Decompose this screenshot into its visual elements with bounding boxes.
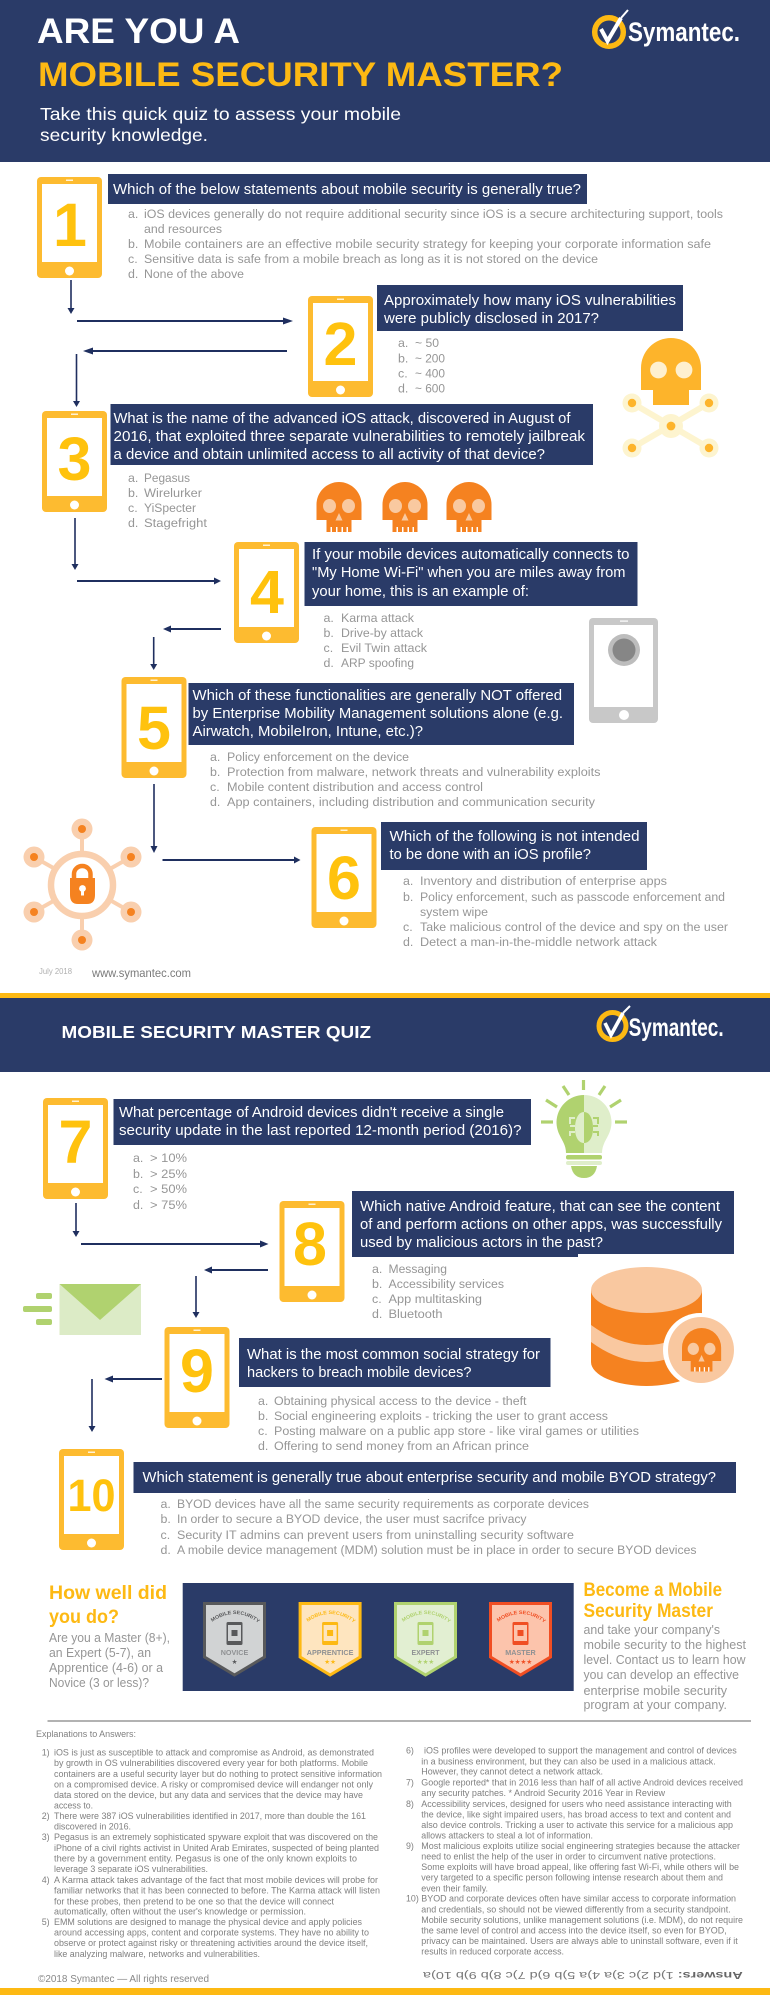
explanations column 2: need to enlist the help of the user in order to circumvent native protections. (421, 1851, 716, 1861)
question 1 options: d. (128, 267, 138, 281)
question 9 heading: hackers to breach mobile devices? (247, 1365, 472, 1381)
question 9 options: Posting malware on a public app store - like viral games or utilities (274, 1424, 639, 1438)
explanations column 1: EMM solutions are designed to manage the physical device and apply policies (54, 1917, 363, 1927)
explanations column 1: access to. (54, 1800, 93, 1810)
question 8 options: b. (372, 1277, 382, 1291)
badge: apprentice: ★★ (324, 1658, 336, 1666)
subtitle (40, 104, 401, 145)
question 4 (234, 542, 638, 670)
question 5 heading: by Enterprise Mobility Management solutions alone (e.g. (192, 706, 563, 722)
arrow: question 5 down (150, 784, 158, 853)
question 1 options: None of the above (144, 267, 244, 281)
become a mobile security master (584, 1580, 746, 1712)
question 3 options: YiSpecter (144, 501, 196, 515)
phone icon 10: 10 (68, 1470, 116, 1521)
question 8 options (372, 1262, 504, 1321)
question 4 heading: If your mobile devices automatically connects to (312, 547, 630, 563)
call to action text: enterprise mobile security (584, 1683, 727, 1698)
arrow: down to question 9 (192, 1276, 200, 1318)
question 1 options (128, 207, 723, 281)
explanations column 1: containers are a useful security layer but do nothing to protect sensitive information (54, 1769, 382, 1779)
question 1 options: and resources (144, 222, 222, 236)
question 9 heading: What is the most common social strategy for (247, 1347, 540, 1363)
score guide text: Are you a Master (8+), (49, 1630, 170, 1645)
explanations column 1: around accessing apps, content and corporate systems. They have no ability to (54, 1928, 369, 1938)
explanations column 2: However, they cannot detect a network attack. (421, 1767, 603, 1777)
question 8 options: d. (372, 1307, 382, 1321)
question 6 options: b. (403, 890, 413, 904)
phone icon 4 (234, 542, 299, 643)
score guide text: Apprentice (4-6) or a (49, 1660, 164, 1675)
call to action text: you can develop an effective (584, 1667, 739, 1682)
phone icon 3: 3 (58, 425, 91, 493)
arrow: question 7 down (72, 1203, 80, 1237)
explanations column 2: BYOD and corporate devices often have similar access to corporate information (421, 1894, 736, 1904)
explanations column 1: Pegasus is an extremely sophisticated spyware exploit that was discovered on the (54, 1832, 378, 1842)
phone icon 1: 1 (53, 191, 87, 259)
question 10 options: BYOD devices have all the same security requirements as corporate devices (177, 1497, 589, 1511)
score guide text: an Expert (5-7), an (49, 1645, 151, 1660)
question 1 heading (108, 174, 587, 204)
heading: become a master: Security Master (584, 1601, 714, 1622)
question 5 options: b. (210, 765, 220, 779)
question 2 options: a. (398, 336, 408, 350)
explanations column 2: even their family. (421, 1883, 488, 1893)
question 3 heading (110, 404, 593, 465)
heading: how well did you do (49, 1583, 167, 1628)
question 5 options: c. (210, 780, 220, 794)
phone icon 10 (59, 1449, 124, 1550)
question 10 options: a. (160, 1497, 171, 1511)
explanations column 2: the device, like sight impaired users, has broad access to text and content and (421, 1809, 731, 1819)
question 6 options (403, 874, 728, 949)
phone icon 8 (280, 1201, 344, 1302)
badge: master: MOBILE SECURITY (496, 1610, 546, 1622)
question 4 heading: "My Home Wi-Fi" when you are miles away from (312, 565, 626, 581)
icon: gray phone with fingerprint (589, 618, 658, 723)
explanations column 1: there by a government entity. Pegasus is one of the only known exploits to (54, 1854, 357, 1864)
question 9 (164, 1327, 639, 1453)
question 8 heading: used by malicious actors in the past? (360, 1235, 603, 1251)
question 3 options: a. (128, 471, 138, 485)
explanations column 2: Accessibility services, designed for users who need assistance interacting with (421, 1799, 732, 1809)
call to action text: level. Contact us to learn how (584, 1652, 746, 1667)
explanations column 1: on a compromised device. A risky or compromised device will endanger not only (54, 1780, 374, 1790)
Symantec logo: Symantec. (628, 17, 740, 47)
question 9 options: Social engineering exploits - tricking the user to grant access (274, 1409, 608, 1423)
arrow: down to question 10 (88, 1379, 96, 1432)
how well did you do (49, 1583, 170, 1690)
question 4 options: Drive-by attack (341, 626, 424, 640)
arrow: to question 8 (81, 1240, 268, 1248)
gold divider band (0, 993, 770, 998)
badge: apprentice (298, 1602, 362, 1677)
question 6 heading: Which of the following is not intended (390, 829, 640, 845)
question 3 heading: 2016, that exploited three separate vulnerabilities to remotely jailbreak (114, 429, 586, 445)
subtitle: security knowledge. (40, 125, 208, 145)
Symantec logo (599, 1006, 724, 1042)
explanations column 1: 1) (42, 1748, 50, 1758)
explanations column 2: any security patches. * Android Security 2016 Year in Review (421, 1788, 666, 1798)
page 2 header banner (0, 998, 770, 1072)
explanations column 1: by growth in OS vulnerabilities discovered every year for both platforms. Mobile (54, 1758, 368, 1768)
question 6 options: system wipe (420, 905, 488, 919)
question 6 options: c. (403, 920, 413, 934)
badge: expert: EXPERT (412, 1650, 440, 1657)
icon: skull and crossbones (622, 338, 718, 458)
question 2 (308, 285, 683, 397)
explanations column 1: like analyzing malware, networks and vulnerabilities. (54, 1949, 260, 1959)
explanations column 2: 9) (406, 1841, 414, 1851)
question 5 options: Policy enforcement on the device (227, 750, 409, 764)
explanations column 2: 6) (406, 1746, 414, 1756)
question 10 options (160, 1497, 696, 1557)
explanations column 1: observe or protect against risky or threatening activities around the device itself, (54, 1938, 368, 1948)
question 10 heading (134, 1462, 736, 1493)
question 5 options: App containers, including distribution and communication security (227, 795, 596, 809)
phone icon 2 (308, 296, 373, 397)
question 4 options: a. (324, 611, 334, 625)
question 4 options: c. (324, 641, 333, 655)
badge: master (489, 1602, 552, 1677)
question 5 options: a. (210, 750, 220, 764)
question 4 heading (304, 542, 638, 606)
question 6 options: a. (403, 874, 413, 888)
explanations column 1: 4) (42, 1875, 50, 1885)
question 7 options: b. (133, 1167, 143, 1181)
question 3 options: Wirelurker (144, 486, 202, 500)
phone icon 9: 9 (180, 1337, 214, 1405)
question 6 options: Detect a man-in-the-middle network attack (420, 935, 658, 949)
Symantec logo (595, 10, 740, 47)
question 2 options: ~ 200 (415, 352, 445, 366)
question 3 options: b. (128, 486, 138, 500)
question 1 options: c. (128, 252, 138, 266)
phone icon 2: 2 (324, 310, 357, 378)
explanations column 1 (42, 1748, 382, 1959)
bottom gold band (0, 1988, 770, 1995)
question 2 options: b. (398, 352, 408, 366)
badge: expert (394, 1602, 457, 1677)
call to action text (584, 1622, 746, 1712)
arrow: down to question 3 (73, 354, 80, 407)
explanations column 2: also device controls. Tricking a user to activate this service for a malicious app (421, 1820, 733, 1830)
explanations column 1: leverage 3 separate iOS vulnerabilities. (54, 1864, 208, 1874)
explanations column 1: discovered in 2016. (54, 1822, 131, 1832)
question 2 options: ~ 600 (415, 382, 445, 396)
question 8 heading: Which native Android feature, that can see the content (360, 1199, 720, 1215)
question 9 options: b. (258, 1409, 268, 1423)
question 7 (43, 1098, 531, 1212)
badge: expert: MOBILE SECURITY (402, 1610, 452, 1622)
question 6 heading: to be done with an iOS profile? (390, 847, 591, 863)
heading: become a master (584, 1580, 722, 1622)
Symantec logo: Symantec. (629, 1014, 724, 1042)
explanations column 2: the same level of control and access into the device itself, so even for BYOD, (421, 1925, 727, 1935)
question 7 options: c. (133, 1182, 143, 1196)
phone icon 7 (43, 1098, 108, 1199)
page 1 footer: July 2018 (39, 966, 72, 976)
question 1 options: Sensitive data is safe from a mobile breach as long as it is not stored on the device (144, 252, 598, 266)
question 5 heading: Which of these functionalities are generally NOT offered (192, 688, 562, 704)
arrow: from question 4 left (163, 626, 221, 632)
arrow: to question 6 (162, 856, 300, 864)
heading: how well did you do: you do? (49, 1607, 119, 1628)
question 10 options: A mobile device management (MDM) solution must be in place in order to secure BYOD devices (177, 1543, 696, 1557)
arrow: question 1 down (68, 280, 74, 314)
badge: apprentice: APPRENTICE (307, 1650, 354, 1657)
explanations column 1: iOS is just as susceptible to attack and compromise as Android, as demonstrated (54, 1748, 374, 1758)
page 1 footer: www.symantec.com (91, 966, 191, 980)
question 8 options: Accessibility services (388, 1277, 504, 1291)
subtitle: Take this quick quiz to assess your mobile (40, 104, 401, 124)
question 5 options (210, 750, 600, 809)
icon: lock network (24, 818, 142, 950)
question 10 (59, 1449, 736, 1557)
explanations column 2: 8) (406, 1799, 414, 1809)
question 9 options: Offering to send money from an African prince (274, 1439, 529, 1453)
question 2 options: ~ 50 (415, 336, 439, 350)
icon: light bulb with bug (541, 1080, 627, 1178)
explanations heading: Explanations to Answers: (36, 1729, 136, 1739)
question 8 options: a. (372, 1262, 382, 1276)
title line 1: ARE YOU A (37, 12, 240, 51)
icon: three orange skulls (316, 482, 492, 532)
question 8 (280, 1191, 734, 1321)
question 10 heading: Which statement is generally true about enterprise security and mobile BYOD strategy? (142, 1470, 716, 1486)
explanations column 1: 5) (42, 1917, 50, 1927)
question 2 heading: Approximately how many iOS vulnerabilities (384, 293, 676, 309)
badge: master: ★★★★ (509, 1658, 532, 1666)
question 7 options (133, 1151, 187, 1212)
badge panel (182, 1583, 574, 1691)
question 2 options: c. (398, 366, 408, 380)
phone icon 3 (42, 411, 107, 512)
question 4 heading: your home, this is an example of: (312, 584, 529, 600)
explanations column 2: 7) (406, 1777, 414, 1787)
score guide text: Novice (3 or less)? (49, 1675, 149, 1690)
question 6 heading (381, 822, 647, 870)
upside-down answers: Answers: 1)d 2)c 3)a 4)a 5)b 6)d 7)c 8)b 9)b 10)a (423, 1969, 743, 1981)
question 3 options (128, 471, 208, 530)
explanations column 2: in a business environment, but they can also be used in a malicious attack. (421, 1756, 716, 1766)
arrow: from question 2 left (83, 348, 287, 354)
explanations column 2: iOS profiles were developed to support the management and control of devices (424, 1746, 737, 1756)
explanations column 1: There were 387 iOS vulnerabilities identified in 2017, more than double the 161 (54, 1811, 366, 1821)
call to action text: program at your company. (584, 1697, 727, 1712)
explanations column 2: results in reduced corporate access. (421, 1947, 564, 1957)
explanations column 2: Google reported* that in 2016 less than half of all active Android devices received (421, 1777, 743, 1787)
question 7 options: a. (133, 1151, 143, 1165)
arrow: down to question 5 (150, 637, 157, 670)
copyright: ©2018 Symantec — All rights reserved (38, 1974, 209, 1985)
question 4 options (324, 611, 428, 670)
phone icon 9 (164, 1327, 230, 1428)
question 7 heading (114, 1099, 531, 1145)
question 1 (37, 174, 723, 281)
question 10 options: In order to secure a BYOD device, the user must sacrifce privacy (177, 1512, 527, 1526)
icon: green envelope (23, 1284, 141, 1335)
question 9 options: c. (258, 1424, 268, 1438)
explanations column 1: A Karma attack takes advantage of the fact that most mobile devices will probe for (54, 1875, 378, 1885)
phone icon 4: 4 (250, 558, 284, 626)
question 2 options: ~ 400 (415, 366, 445, 380)
question 4 options: Karma attack (341, 611, 415, 625)
question 3 heading: a device and obtain unlimited access to all activity of that device? (114, 447, 545, 463)
question 8 options: Bluetooth (388, 1307, 443, 1321)
question 7 options: > 50% (150, 1182, 187, 1196)
call to action text: mobile security to the highest (584, 1637, 746, 1652)
question 7 options: d. (133, 1198, 143, 1212)
question 6 options: Inventory and distribution of enterprise apps (420, 874, 667, 888)
question 3 options: d. (128, 516, 138, 530)
question 5 heading (188, 683, 574, 745)
question 2 options: d. (398, 382, 408, 396)
question 1 options: b. (128, 237, 138, 251)
badge: apprentice: MOBILE SECURITY (306, 1610, 356, 1622)
question 8 options: c. (372, 1292, 382, 1306)
title line 2: MOBILE SECURITY MASTER? (38, 56, 563, 94)
explanations column 2: 10) (406, 1894, 419, 1904)
question 3 options: Pegasus (144, 471, 190, 485)
question 4 options: Evil Twin attack (341, 641, 428, 655)
page 1 header banner (0, 0, 770, 162)
explanations column 1: 3) (42, 1832, 50, 1842)
question 6 options: Policy enforcement, such as passcode enforcement and (420, 890, 725, 904)
question 10 options: c. (160, 1528, 170, 1542)
explanations column 2: Most malicious exploits utilize social engineering strategies because the attacker (421, 1841, 740, 1851)
heading: become a master: Become a Mobile (584, 1580, 722, 1601)
question 8 heading: of and perform actions on other apps, was successfully (360, 1217, 723, 1233)
question 2 heading: were publicly disclosed in 2017? (383, 311, 599, 327)
badge: novice: MOBILE SECURITY (210, 1610, 260, 1622)
phone icon 8: 8 (293, 1210, 327, 1278)
phone icon 5: 5 (137, 694, 171, 762)
question 7 heading: security update in the last reported 12-month period (2016)? (119, 1123, 522, 1139)
phone icon 6 (312, 827, 376, 928)
question 7 options: > 10% (150, 1151, 187, 1165)
arrow: to question 2 (77, 318, 293, 324)
call to action text: and take your company's (584, 1622, 720, 1637)
question 3 heading: What is the name of the advanced iOS attack, discovered in August of (114, 411, 571, 427)
question 6 (312, 822, 728, 949)
question 4 options: b. (324, 626, 334, 640)
explanations column 2: privacy can be maintained. Users are always able to uninstall software, even if it (421, 1936, 738, 1946)
question 1 options: Mobile containers are an effective mobile security strategy for keeping your corporate information safe (144, 237, 711, 251)
explanations column 2 (406, 1746, 743, 1957)
question 7 options: > 75% (150, 1198, 187, 1212)
question 5 options: Mobile content distribution and access control (227, 780, 483, 794)
heading: how well did you do: How well did (49, 1583, 167, 1604)
question 7 options: > 25% (150, 1167, 187, 1181)
arrow: from question 8 left (204, 1266, 268, 1274)
question 10 options: d. (160, 1543, 171, 1557)
explanations column 1: automatically, often without the user's knowledge or permission. (54, 1906, 306, 1916)
explanations column 1: 2) (42, 1811, 50, 1821)
question 8 options: App multitasking (388, 1292, 482, 1306)
question 10 options: b. (160, 1512, 171, 1526)
question 6 options: d. (403, 935, 413, 949)
arrow: from question 9 left (104, 1376, 162, 1382)
badge: expert: ★★★ (417, 1658, 434, 1666)
question 5 heading: Airwatch, MobileIron, Intune, etc.)? (192, 724, 423, 740)
question 2 options (398, 336, 445, 396)
question 1 heading: Which of the below statements about mobile security is generally true? (113, 182, 581, 198)
question 3 options: Stagefright (144, 516, 208, 530)
question 1 options: iOS devices generally do not require additional security since iOS is a secure architecturing support, tools (144, 207, 723, 221)
explanations column 2: Some exploits will have broad appeal, like offering fast Wi-Fi, while others will be (421, 1862, 739, 1872)
question 8 options: Messaging (388, 1262, 447, 1276)
question 1 options: a. (128, 207, 138, 221)
explanations column 2: Mobile security solutions, unlike management solutions (i.e. MDM), do not require (421, 1915, 743, 1925)
question 8 heading (352, 1191, 734, 1257)
arrow: to question 4 (77, 578, 221, 584)
phone icon 6: 6 (327, 844, 361, 912)
question 9 options: d. (258, 1439, 268, 1453)
question 9 options: Obtaining physical access to the device - theft (274, 1394, 527, 1408)
question 10 options: Security IT admins can prevent users from uninstalling security software (177, 1528, 574, 1542)
badge: novice: ★ (232, 1658, 238, 1666)
page 1 footer (39, 966, 191, 980)
explanations column 2: allows attackers to steal a lot of information. (421, 1830, 593, 1840)
explanations column 1: familiar networks that it has been connected to before. The Karma attack will listen (54, 1886, 380, 1896)
badge: novice (203, 1602, 266, 1677)
question 5 options: d. (210, 795, 220, 809)
question 6 options: Take malicious control of the device and spy on the user (420, 920, 728, 934)
question 9 options (258, 1394, 639, 1453)
question 9 heading (239, 1338, 550, 1387)
question 3 options: c. (128, 501, 138, 515)
page 2 title: MOBILE SECURITY MASTER QUIZ (62, 1022, 371, 1042)
explanations column 2: very targeted to a specific person following intense research about them and (421, 1873, 723, 1883)
badge: novice: NOVICE (221, 1650, 249, 1657)
question 3 (42, 404, 593, 530)
question 7 heading: What percentage of Android devices didn't receive a single (119, 1105, 504, 1121)
arrow: question 3 down (72, 518, 78, 570)
explanations column 1: for these probes, then pretend to be one so that the device will connect (54, 1896, 335, 1906)
phone icon 5 (122, 677, 186, 778)
explanations column 1: iPhone of a civil rights activist in United Arab Emirates, suspected of being planted (54, 1843, 379, 1853)
question 9 options: a. (258, 1394, 268, 1408)
score guide text (49, 1630, 170, 1690)
question 4 options: ARP spoofing (341, 656, 414, 670)
phone icon 7: 7 (59, 1108, 92, 1176)
question 4 options: d. (324, 656, 334, 670)
phone icon 1 (37, 177, 102, 278)
explanations column 2: and credentials, so should not be viewed differently from a security standpoint. (421, 1904, 731, 1914)
question 5 (122, 677, 600, 809)
explanations column 1: data stored on the device, but any data and services that the device may have (54, 1790, 363, 1800)
question 5 options: Protection from malware, network threats and vulnerability exploits (227, 765, 600, 779)
icon: database with skull (591, 1267, 737, 1387)
question 2 heading (377, 285, 683, 331)
badge: master: MASTER (505, 1650, 536, 1657)
